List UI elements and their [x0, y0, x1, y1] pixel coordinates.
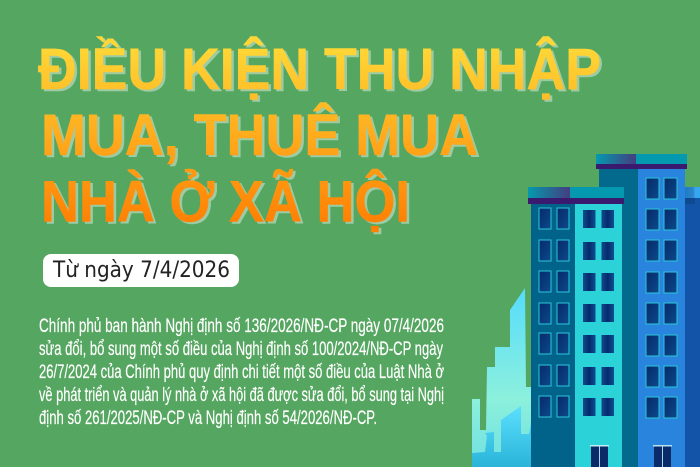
foreground skyline	[472, 406, 531, 467]
date badge	[43, 254, 239, 287]
tall building windows	[646, 178, 677, 418]
title shadow: ĐIỀU KIỆN THU NHẬP	[40, 39, 604, 104]
tall building	[596, 154, 687, 467]
tall building roof	[596, 154, 687, 169]
front building door	[590, 445, 609, 467]
front building left windows	[539, 208, 569, 417]
date badge: Từ ngày 7/4/2026	[52, 258, 230, 283]
front building	[528, 187, 624, 467]
title text	[38, 37, 601, 234]
front building roof	[528, 187, 624, 204]
body paragraph: sửa đổi, bổ sung một số điều của Nghị định số 100/2024/NĐ-CP ngày	[39, 339, 443, 360]
body paragraph	[39, 316, 444, 429]
title shadow: NHÀ Ở XÃ HỘI	[44, 172, 412, 236]
body paragraph: 26/7/2024 của Chính phủ quy định chi tiết một số điều của Luật Nhà ở	[39, 362, 444, 383]
body paragraph: Chính phủ ban hành Nghị định số 136/2026/NĐ-CP ngày 07/4/2026	[39, 316, 444, 337]
title text: ĐIỀU KIỆN THU NHẬP	[38, 37, 601, 102]
title text: NHÀ Ở XÃ HỘI	[41, 170, 410, 234]
background skyline	[472, 288, 531, 467]
title text: MUA, THUÊ MUA	[41, 103, 478, 168]
title shadow	[40, 39, 604, 236]
tall building door	[653, 445, 672, 467]
front building right windows	[583, 210, 614, 416]
body paragraph: về phát triển và quản lý nhà ở xã hội đã được sửa đổi, bổ sung tại Nghị	[39, 385, 444, 406]
title	[38, 37, 604, 236]
illustration: city buildings	[472, 154, 700, 467]
right building	[685, 187, 700, 467]
body paragraph: định số 261/2025/NĐ-CP và Nghị định số 54/2026/NĐ-CP.	[39, 408, 377, 429]
title shadow: MUA, THUÊ MUA	[44, 105, 480, 170]
